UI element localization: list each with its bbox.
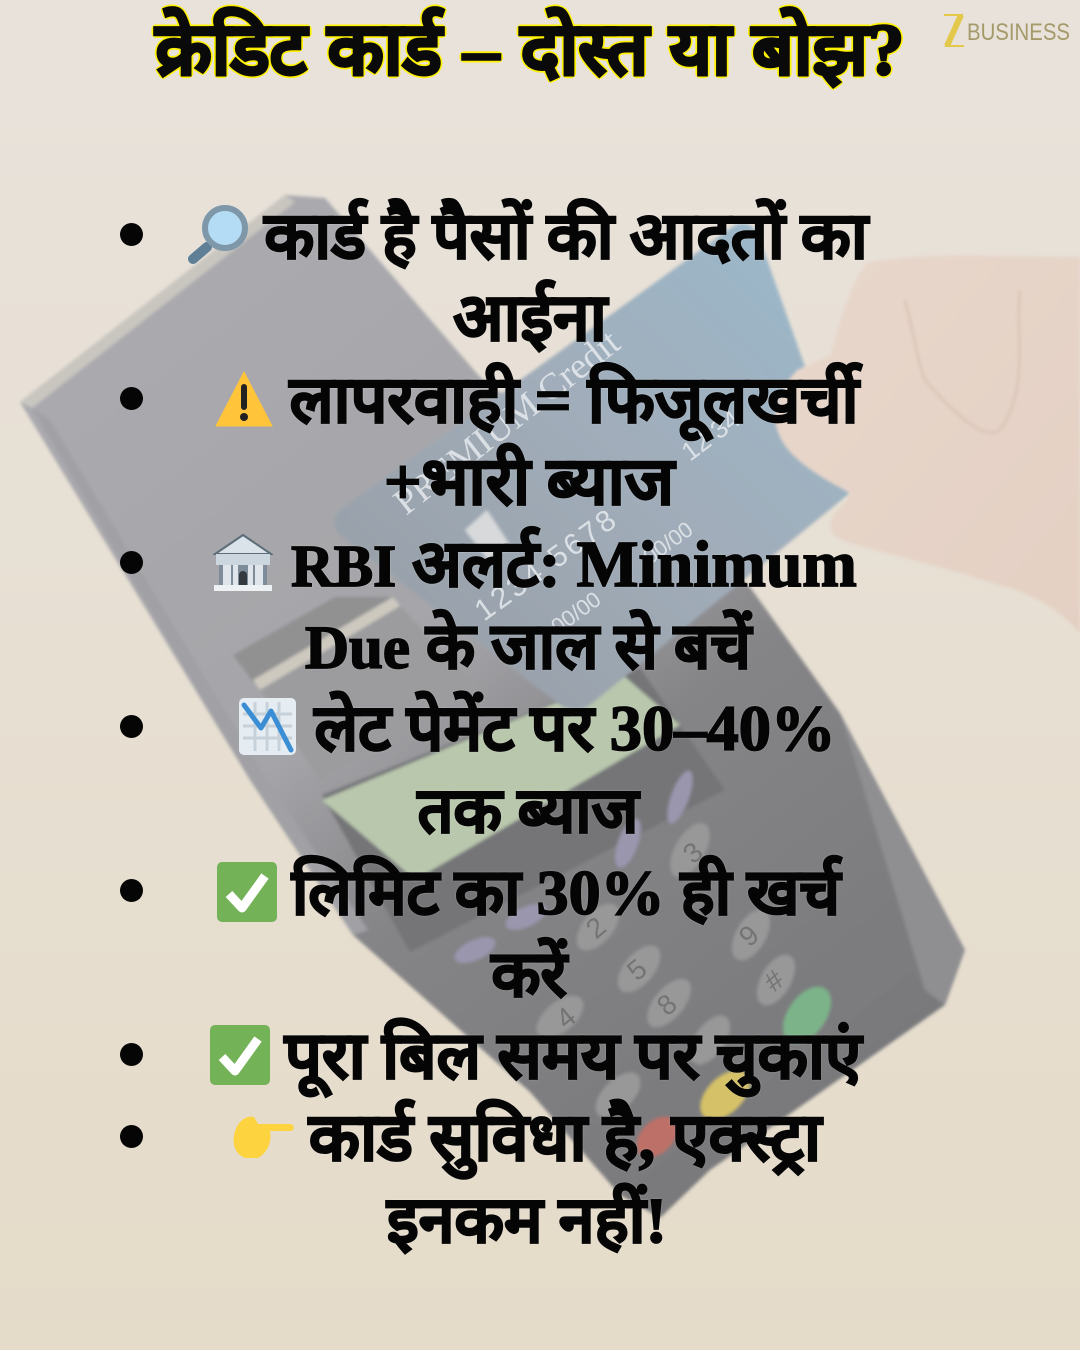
text: पूरा बिल समय पर चुकाएं xyxy=(285,1021,861,1093)
bullet 7: pointing hand xyxy=(120,1098,824,1256)
text: तक ब्याज xyxy=(418,776,638,846)
right strip xyxy=(840,713,965,1005)
text: कार्ड सुविधा है, एक्स्ट्रा xyxy=(309,1102,821,1175)
background photo: card terminal and hand: 5 xyxy=(621,953,653,987)
text: Due के जाल से बचें xyxy=(305,611,751,682)
title: क्रेडिट कार्ड – दोस्त या बोझ? xyxy=(156,9,904,90)
screen bezel xyxy=(322,668,725,952)
text: लिमिट का 30% ही खर्च xyxy=(292,857,840,928)
bullet 4: chart down xyxy=(120,690,836,846)
bullet 6: check xyxy=(120,1017,865,1098)
bullet 3: bank xyxy=(120,526,857,682)
keypad buttons xyxy=(451,768,841,1165)
text: +भारी ब्याज xyxy=(384,446,674,519)
bullet 1: magnifier xyxy=(120,198,870,355)
background photo: card terminal and hand: 1234 5678 xyxy=(469,502,625,628)
background photo: card terminal and hand: 00/00 xyxy=(638,516,697,569)
text: RBI अलर्ट: Minimum xyxy=(291,529,857,601)
text: लेट पेमेंट पर 30–40% xyxy=(314,693,836,764)
screen xyxy=(322,675,680,880)
text: इनकम नहीं! xyxy=(387,1185,667,1256)
background photo: card terminal and hand: PREMIUM Credit xyxy=(386,321,628,523)
bullet list xyxy=(120,198,870,1256)
background photo: card terminal and hand: 4 xyxy=(550,1001,582,1035)
background photo: card terminal and hand: 8 xyxy=(651,988,683,1022)
bullet 2: warning xyxy=(120,362,864,519)
background photo: card terminal and hand: 3 xyxy=(677,836,709,870)
bullet 5: check xyxy=(120,854,844,1010)
text: लापरवाही = फिजूलखर्ची xyxy=(290,365,858,437)
text: करें xyxy=(491,939,567,1010)
terminal body xyxy=(20,195,965,1218)
background photo: card terminal and hand: 2 xyxy=(580,911,612,945)
background photo: card terminal and hand: # xyxy=(758,964,790,998)
card xyxy=(334,223,850,710)
printer slot xyxy=(233,597,395,682)
background photo: card terminal and hand: 9 xyxy=(733,919,765,953)
text: आईना xyxy=(453,282,607,355)
hand xyxy=(775,255,1080,633)
background photo: card terminal and hand: 12 34 xyxy=(676,404,746,467)
logo: Z Business xyxy=(944,14,1070,48)
background photo: card terminal and hand: 00/00 xyxy=(546,586,605,639)
text: कार्ड है पैसों की आदतों का xyxy=(264,201,868,273)
